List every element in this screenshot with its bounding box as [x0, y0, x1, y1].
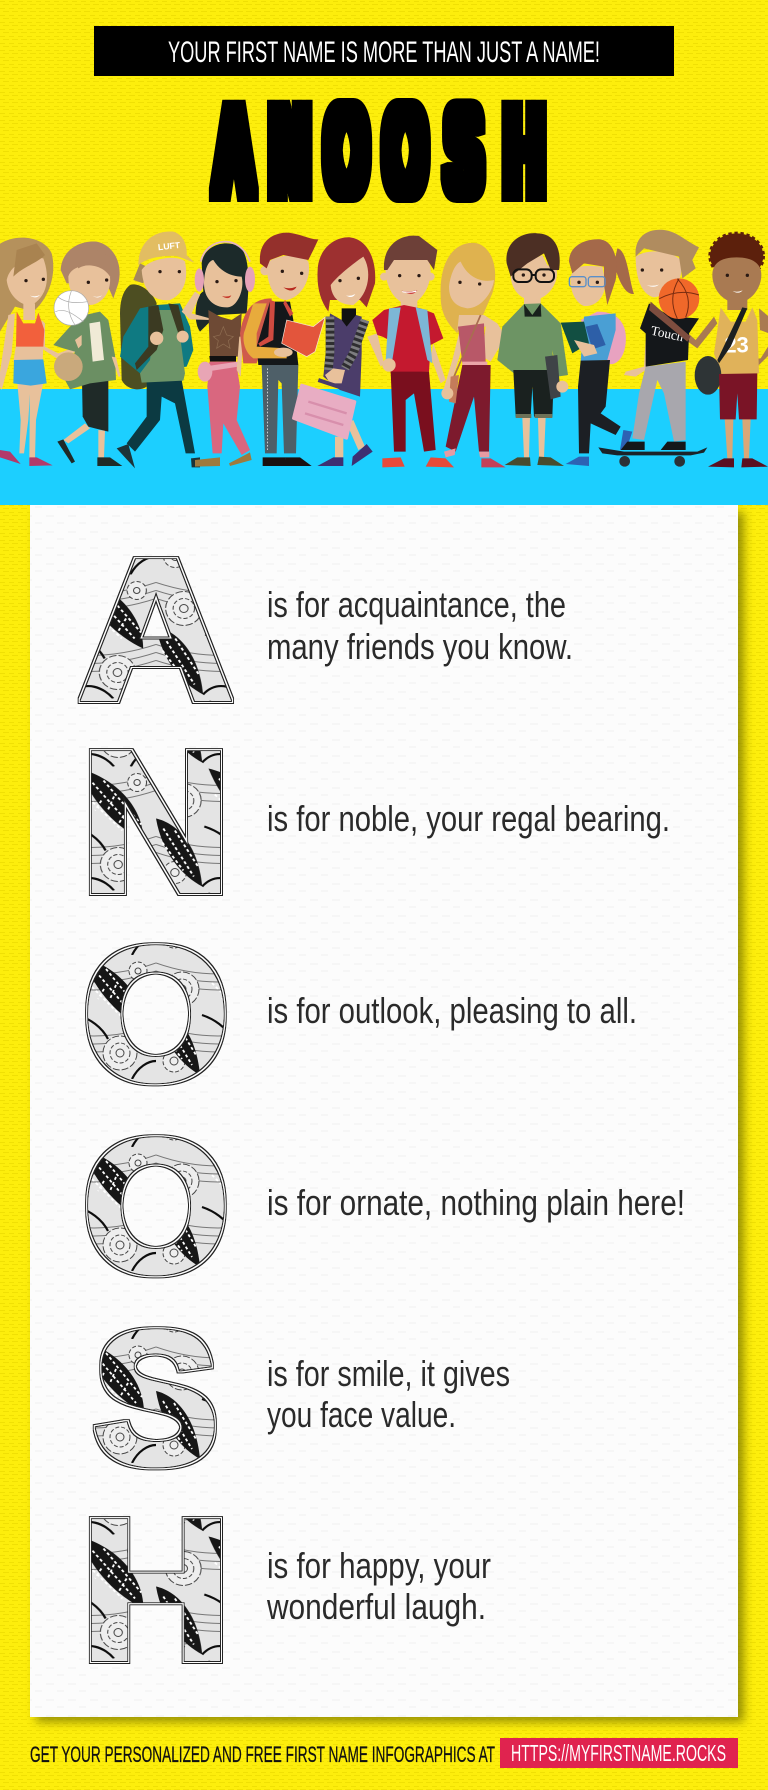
- footer: [30, 1738, 738, 1768]
- icon: basketball: [659, 278, 699, 319]
- row: letter N: [81, 711, 670, 933]
- text: H: is for happy, your: [267, 1545, 491, 1586]
- letter A: A: [79, 518, 233, 741]
- icon: skateboard: [598, 447, 707, 467]
- text: A: many friends you know.: [267, 626, 573, 667]
- text: H: wonderful laugh.: [266, 1586, 486, 1627]
- person: boy with glasses: [497, 233, 568, 466]
- header banner: [94, 26, 674, 76]
- person: boy reading a book: [240, 233, 325, 466]
- row: letter S: [93, 1293, 510, 1503]
- person: red-haired girl with pink bag: [293, 237, 375, 466]
- icon: glasses: [513, 269, 554, 282]
- letter N: N: [81, 711, 231, 933]
- icon: pink bag: [293, 385, 355, 438]
- person: boy in tank top with shoulder bag: [677, 233, 768, 467]
- text: N: is for noble, your regal bearing.: [267, 798, 670, 839]
- footer text: GET YOUR PERSONALIZED AND FREE FIRST NAME INFOGRAPHICS AT: [30, 1742, 495, 1767]
- row: letter O second: [83, 1101, 685, 1311]
- letter O: O: [83, 909, 229, 1119]
- person: boy in red shirt: [367, 236, 454, 467]
- icon: volleyball: [54, 291, 89, 325]
- text: S: you face value.: [267, 1394, 456, 1435]
- text: A: is for acquaintance, the: [267, 584, 566, 625]
- person: girl with ponytail and tablet: [561, 239, 634, 466]
- letter O: O: [83, 1101, 229, 1311]
- title: name: ANOOSH: [215, 79, 544, 222]
- text: S: [267, 1353, 510, 1435]
- icon: book: [282, 317, 325, 357]
- person: girl with headphones: [182, 242, 255, 467]
- person: girl in orange top: [0, 238, 82, 466]
- white panel: [30, 505, 738, 1717]
- illustration: group of students: [0, 230, 768, 468]
- text: S: is for smile, it gives: [267, 1353, 510, 1394]
- panel shadow: [36, 512, 744, 1722]
- person: girl with volleyball: [53, 241, 122, 466]
- row: letter O: [83, 909, 637, 1119]
- person: skateboarder with basketball: [598, 230, 707, 467]
- blue floor band: [0, 389, 768, 505]
- letter H: H: [81, 1479, 231, 1701]
- person: backpacker with cap: LUFT: [157, 240, 181, 252]
- text: H: [266, 1545, 491, 1627]
- row: letter A: [79, 518, 573, 741]
- text: O second: is for ornate, nothing plain here!: [267, 1182, 685, 1223]
- person: backpacker with cap: [117, 231, 200, 468]
- letter S: S: [93, 1293, 219, 1503]
- row: letter H: [81, 1479, 491, 1701]
- text: O: is for outlook, pleasing to all.: [267, 990, 637, 1031]
- right half of the group: [367, 230, 768, 467]
- person: skateboarder with basketball: Touch: [650, 323, 685, 344]
- person: blonde girl: [441, 243, 506, 467]
- left half of the group: [0, 231, 375, 468]
- person: boy in tank top with shoulder bag: 23: [724, 333, 749, 358]
- text: A: [267, 584, 573, 667]
